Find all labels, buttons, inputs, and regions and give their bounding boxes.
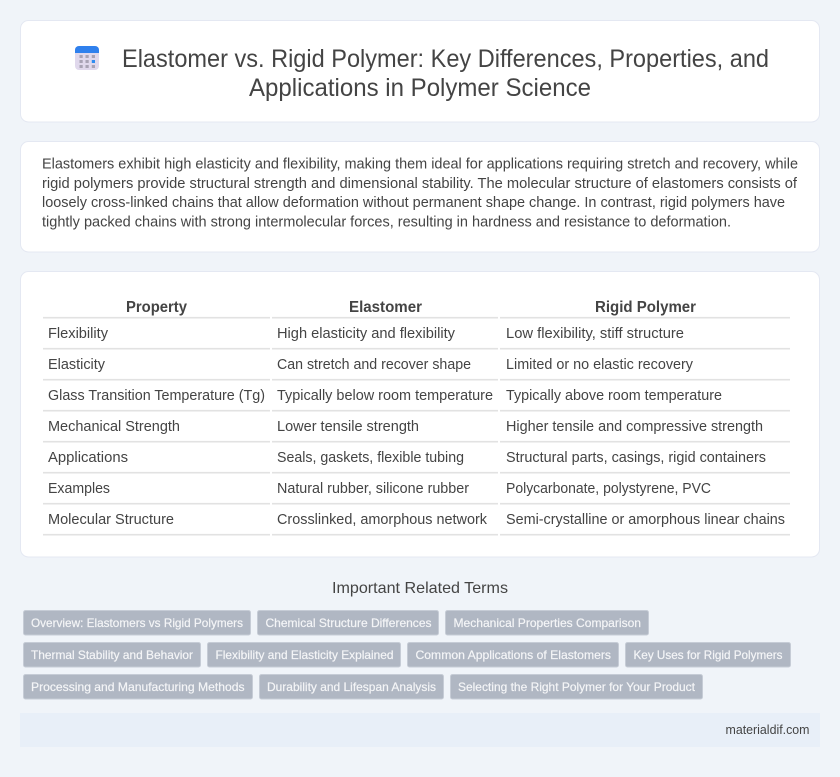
header panel (20, 20, 820, 122)
row: examples: Natural rubber, silicone rubber (277, 481, 469, 497)
row: molecular structure: Molecular Structure (48, 512, 174, 528)
row: mechanical strength (48, 419, 763, 435)
row: flexibility (48, 326, 684, 342)
row: molecular structure: Crosslinked, amorphous network (277, 512, 488, 528)
title: Elastomer vs. Rigid Polymer: Key Differences, Properties, and (122, 45, 769, 73)
tag (626, 642, 790, 667)
row: glass transition temperature: Typically above room temperature (506, 388, 722, 404)
row: applications: Applications (48, 450, 128, 466)
tag: Processing and Manufacturing Methods (31, 680, 244, 694)
tag: Key Uses for Rigid Polymers (634, 648, 782, 662)
tag (260, 674, 444, 699)
tag: Selecting the Right Polymer for Your Product (458, 680, 696, 694)
row: molecular structure (48, 512, 785, 528)
tag (258, 610, 438, 635)
tag: Common Applications of Elastomers (416, 648, 611, 662)
row: mechanical strength: Lower tensile strength (277, 419, 419, 435)
row: molecular structure: Semi-crystalline or amorphous linear chains (506, 512, 785, 528)
table header: Rigid Polymer (595, 299, 696, 316)
row: elasticity: Elasticity (48, 357, 106, 373)
row: applications: Structural parts, casings, rigid containers (506, 450, 766, 466)
tag (208, 642, 400, 667)
row: flexibility: High elasticity and flexibility (277, 326, 456, 342)
row: glass transition temperature: Typically below room temperature (277, 388, 493, 404)
text block: introduction paragraph (42, 156, 798, 230)
table header: Property (126, 299, 187, 316)
tag: Thermal Stability and Behavior (31, 648, 193, 662)
table header (126, 299, 696, 316)
tag (24, 674, 252, 699)
footer (20, 713, 820, 747)
title (122, 45, 769, 102)
panel: comparison table (20, 272, 820, 557)
row: flexibility: Flexibility (48, 326, 109, 342)
tag: Mechanical Properties Comparison (454, 616, 641, 630)
row: flexibility: Low flexibility, stiff structure (506, 326, 684, 342)
row: elasticity: Limited or no elastic recovery (506, 357, 694, 373)
row: examples: Examples (48, 481, 110, 497)
tag list (24, 610, 790, 699)
tag (446, 610, 648, 635)
tag: Flexibility and Elasticity Explained (216, 648, 394, 662)
tag: Chemical Structure Differences (266, 616, 432, 630)
text block: introduction paragraph: tightly packed chains with strong intermolecular forces, resulting in hardness and resistance to deformation. (42, 214, 731, 230)
row: applications: Seals, gaskets, flexible tubing (277, 450, 464, 466)
text block: introduction paragraph: Elastomers exhibit high elasticity and flexibility, making them ideal for applications requiring stretch and recovery, while (42, 156, 798, 172)
row: mechanical strength: Higher tensile and compressive strength (506, 419, 763, 435)
row: glass transition temperature: Glass Transition Temperature (Tg) (48, 388, 265, 404)
row: glass transition temperature (48, 388, 722, 404)
row: examples: Polycarbonate, polystyrene, PVC (506, 481, 711, 497)
text block: introduction paragraph: loosely cross-linked chains that allow deformation without permanent shape change. In contrast, rigid polymers have (42, 195, 785, 211)
row: applications (48, 450, 766, 466)
row: elasticity: Can stretch and recover shape (277, 357, 471, 373)
footer: materialdif.com (726, 722, 810, 737)
panel: introduction (20, 142, 820, 252)
heading: important related terms: Important Related Terms (332, 580, 508, 597)
tag (408, 642, 618, 667)
row: elasticity (48, 357, 694, 373)
row: examples (48, 481, 711, 497)
tag (24, 642, 200, 667)
tag (450, 674, 702, 699)
text block: introduction paragraph: rigid polymers provide structural strength and dimensional stability. The molecular structure of elastomers consists of (42, 176, 798, 192)
table header: Elastomer (349, 299, 422, 316)
tag: Overview: Elastomers vs Rigid Polymers (31, 616, 243, 630)
icon: calendar (75, 46, 99, 70)
row: mechanical strength: Mechanical Strength (48, 419, 180, 435)
tag (24, 610, 250, 635)
tag: Durability and Lifespan Analysis (267, 680, 436, 694)
title: Applications in Polymer Science (249, 74, 591, 102)
